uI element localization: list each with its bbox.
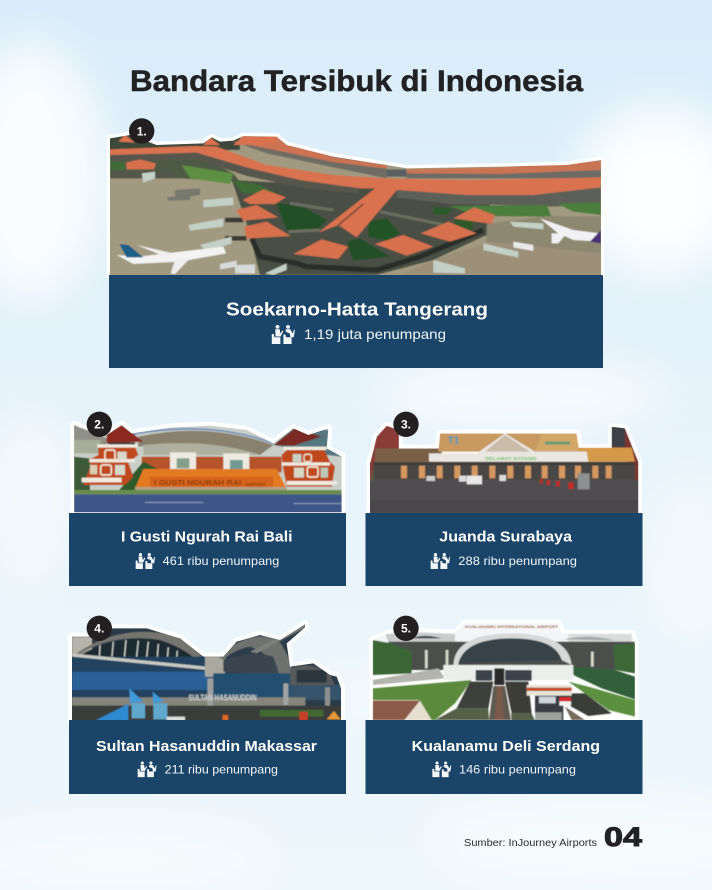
bar: Soekarno-Hatta (109, 275, 603, 368)
badge 2 (87, 412, 112, 437)
name: Soekarno-Hatta: Soekarno-Hatta Tangerang (226, 298, 488, 320)
photo: Kualanamu airport: KUALANAMU INTERNATIONAL AIRPORT (465, 624, 559, 629)
name: I Gusti Ngurah Rai: I Gusti Ngurah Rai Bali (121, 529, 292, 546)
sign (135, 469, 287, 488)
left tower (83, 447, 138, 485)
hexagon roofs (126, 159, 156, 169)
photo: Ngurah Rai airport: I GUSTI NGURAH RAI (154, 478, 241, 487)
icon: passengers (272, 325, 295, 344)
passengers: 211 ribu: 211 ribu penumpang (165, 762, 278, 776)
name: Kualanamu: Kualanamu Deli Serdang (412, 738, 600, 755)
central courtyard (232, 180, 490, 275)
passengers: 146 ribu: 146 ribu penumpang (459, 762, 576, 776)
badge 3: 3. (401, 418, 411, 432)
plane right (540, 218, 600, 243)
passengers: 288 ribu: 288 ribu penumpang (458, 554, 577, 568)
photo: Kualanamu airport (370, 620, 637, 721)
back scalloped roofs (233, 139, 387, 178)
passengers: 1,19 juta: 1,19 juta penumpang (304, 326, 446, 342)
photo: Juanda airport: T1 (448, 435, 460, 446)
panel 1: Soekarno-Hatta (107, 118, 607, 368)
page number: 04 (604, 822, 642, 852)
photo: Ngurah Rai airport (70, 422, 347, 515)
source note: Sumber: InJourney Airports (464, 837, 597, 849)
icon: passengers (138, 762, 157, 777)
bridges, vehicles (142, 172, 543, 275)
bar: Kualanamu (366, 720, 642, 794)
badge 3 (393, 412, 419, 437)
bar: Sultan Hasanuddin (69, 720, 346, 794)
name: Juanda: Juanda Surabaya (439, 529, 573, 546)
panel 2: I Gusti Ngurah Rai (69, 412, 347, 586)
icon: passengers (431, 553, 450, 569)
photo: Ngurah Rai airport: AIRPORT (245, 482, 266, 487)
photo: Juanda airport: SELAMAT DATANG (485, 456, 537, 461)
photo: Soekarno-Hatta terminal (107, 133, 607, 277)
icon: passengers (136, 553, 155, 569)
panel 4: Sultan Hasanuddin (69, 616, 346, 794)
photo: Sultan Hasanuddin airport (70, 623, 343, 723)
badge 4: 4. (94, 622, 104, 636)
badge 1: 1. (137, 124, 147, 138)
photo: Sultan Hasanuddin airport: SULTAN HASANUDDIN (188, 694, 257, 703)
photo: Juanda airport (368, 426, 642, 514)
pier walls (252, 230, 483, 270)
badge 1 (129, 118, 154, 144)
panel 5: Kualanamu (366, 616, 642, 794)
upper left strip (107, 133, 240, 150)
name: Sultan Hasanuddin: Sultan Hasanuddin Makassar (96, 738, 317, 755)
main roof (110, 146, 601, 195)
right tower (282, 448, 335, 487)
badge 4 (87, 616, 112, 641)
title: Bandara Tersibuk di Indonesia (130, 65, 583, 98)
plane left (117, 247, 226, 264)
passengers: 461 ribu: 461 ribu penumpang (163, 554, 279, 568)
bar: Juanda (366, 513, 642, 586)
right side (394, 196, 601, 207)
bar: I Gusti Ngurah Rai (69, 513, 346, 586)
badge 2: 2. (94, 418, 104, 432)
badge 5: 5. (401, 622, 411, 636)
panel 3: Juanda (366, 412, 642, 586)
badge 5 (393, 616, 419, 641)
icon: passengers (432, 762, 451, 777)
